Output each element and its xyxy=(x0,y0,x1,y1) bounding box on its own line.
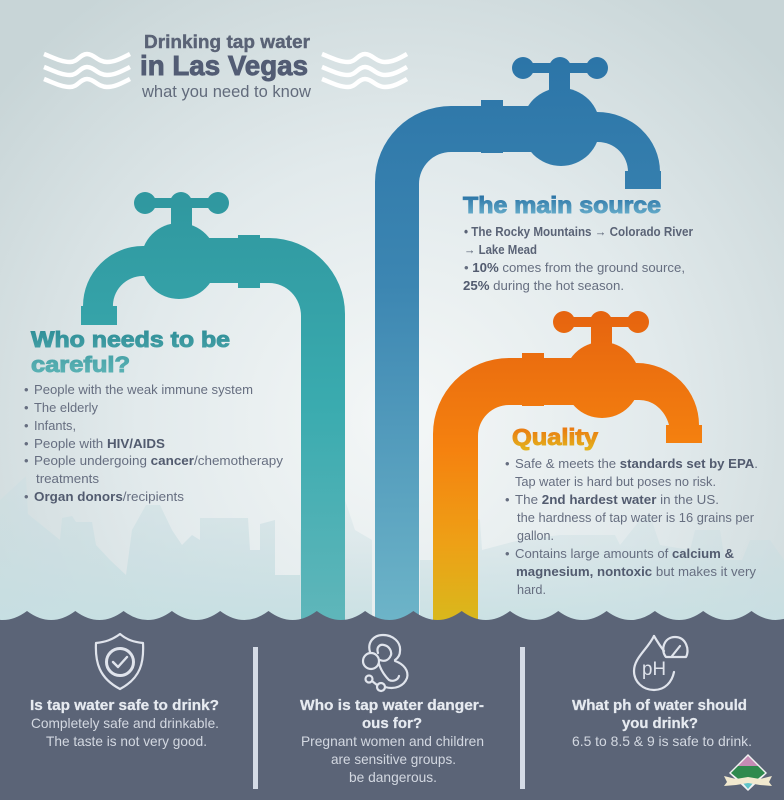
panel: quality xyxy=(505,424,758,597)
divider left xyxy=(253,647,258,789)
question: Is tap water safe to drink? xyxy=(30,698,219,714)
blue faucet xyxy=(375,57,661,620)
heading: who needs to be careful: careful? xyxy=(31,352,130,377)
answer: 6.5 to 8.5 & 9 is safe to drink. xyxy=(572,733,752,749)
decorative waves right xyxy=(322,54,407,87)
answer xyxy=(301,733,484,785)
list: at-risk groups: People undergoing cancer/chemotherapy xyxy=(34,453,284,468)
text: quality details: magnesium, nontoxic but makes it very xyxy=(516,564,757,579)
text: source details: 25% during the hot season. xyxy=(463,278,624,293)
question: ous for? xyxy=(362,716,422,732)
text: quality details: Safe & meets the standards set by EPA. xyxy=(515,456,758,471)
text: quality details: Tap water is hard but poses no risk. xyxy=(515,474,716,489)
background xyxy=(0,0,784,620)
question: you drink? xyxy=(622,716,698,732)
title line 3: what you need to know xyxy=(141,82,312,101)
list: at-risk groups xyxy=(24,382,284,504)
list: at-risk groups: • xyxy=(24,418,29,433)
icon: shield with check xyxy=(96,634,143,689)
title line 2: in Las Vegas xyxy=(140,50,308,81)
panel: who needs to be careful xyxy=(24,327,284,504)
list: at-risk groups: • xyxy=(24,489,29,504)
list: at-risk groups: People with HIV/AIDS xyxy=(34,436,165,451)
icon: mother and child xyxy=(363,635,407,691)
logo badge xyxy=(724,754,772,791)
list: at-risk groups: Organ donors/recipients xyxy=(34,489,185,504)
answer: be dangerous. xyxy=(349,769,437,785)
title line 1: Drinking tap water xyxy=(144,31,310,52)
heading: quality: Quality xyxy=(512,424,598,450)
title xyxy=(140,31,312,101)
answer: are sensitive groups. xyxy=(331,751,456,767)
panel: who is tap water dangerous for xyxy=(300,635,484,785)
text: quality details: Contains large amounts of calcium & xyxy=(515,546,734,561)
question: What ph of water should xyxy=(572,698,747,714)
text: quality details: • xyxy=(505,546,510,561)
list: at-risk groups: Infants, xyxy=(34,418,76,433)
icon: ph drop with gauge xyxy=(634,636,688,690)
text: quality details: The 2nd hardest water in the US. xyxy=(515,492,719,507)
text: quality details: • xyxy=(505,492,510,507)
list: at-risk groups: • xyxy=(24,436,29,451)
answer xyxy=(31,715,219,749)
text: source details: • 10% comes from the ground source, xyxy=(464,260,685,275)
question: Who is tap water danger- xyxy=(300,698,484,714)
orange faucet xyxy=(433,311,702,620)
skyline silhouette left xyxy=(0,476,300,620)
answer: Pregnant women and children xyxy=(301,733,484,749)
heading: who needs to be careful xyxy=(31,327,230,377)
heading: who needs to be careful: Who needs to be xyxy=(31,327,230,352)
text: quality details: hard. xyxy=(517,582,546,597)
question xyxy=(300,698,484,732)
text: source details: • The Rocky Mountains → Colorado River xyxy=(464,225,693,239)
icon: ph drop with gauge: pH xyxy=(642,659,666,680)
text: quality details: gallon. xyxy=(517,528,554,543)
panel: is tap water safe xyxy=(30,634,219,749)
skyline silhouette right xyxy=(300,480,784,620)
text: source details xyxy=(463,225,693,293)
list: at-risk groups: • xyxy=(24,382,29,397)
decorative waves left xyxy=(44,54,130,87)
answer: Completely safe and drinkable. xyxy=(31,715,219,731)
text: quality details xyxy=(505,456,758,597)
heading: the main source: The main source xyxy=(463,192,661,218)
panel: what ph of water xyxy=(572,636,752,749)
water band xyxy=(0,611,784,800)
divider right xyxy=(520,647,525,789)
answer: The taste is not very good. xyxy=(46,733,207,749)
list: at-risk groups: • xyxy=(24,400,29,415)
list: at-risk groups: People with the weak immune system xyxy=(34,382,253,397)
teal faucet xyxy=(81,192,345,620)
list: at-risk groups: The elderly xyxy=(34,400,98,415)
text: quality details: • xyxy=(505,456,510,471)
text: source details: → Lake Mead xyxy=(464,243,537,257)
list: at-risk groups: treatments xyxy=(36,471,100,486)
list: at-risk groups: • xyxy=(24,453,29,468)
question xyxy=(572,698,747,732)
text: quality details: the hardness of tap water is 16 grains per xyxy=(517,510,755,525)
panel: the main source xyxy=(463,192,693,293)
